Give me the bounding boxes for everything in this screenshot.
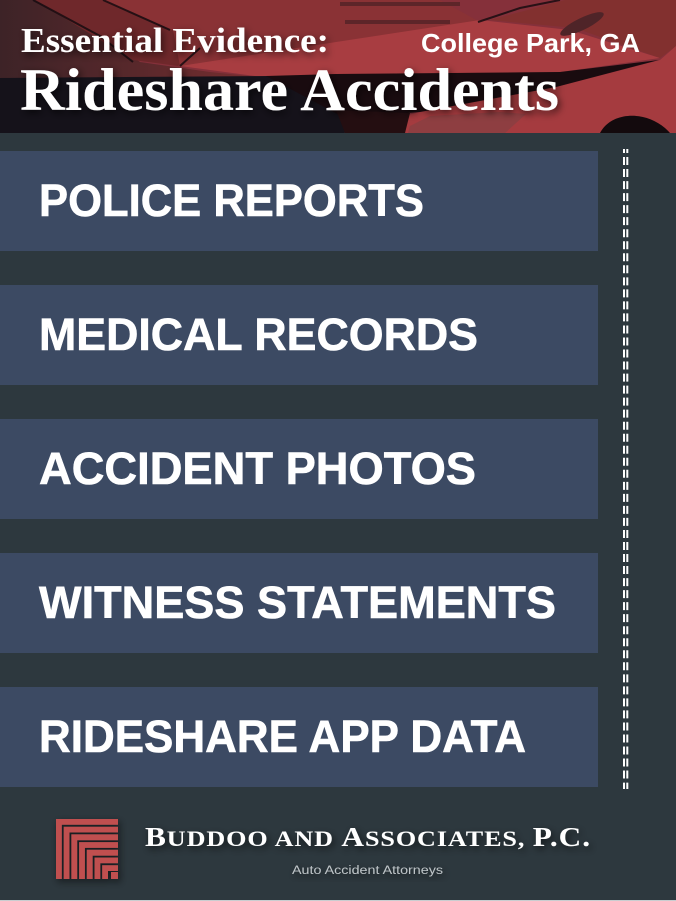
- panel: police reports: [0, 151, 598, 251]
- icon: firm logo: [59, 822, 118, 879]
- firm tagline: Auto Accident Attorneys: [292, 865, 443, 877]
- red crease band: [35, 0, 200, 66]
- dashed road line: [624, 149, 627, 789]
- windshield blob: [558, 8, 606, 40]
- label: medical records: MEDICAL RECORDS: [39, 309, 478, 360]
- wheel arch: [600, 116, 670, 133]
- panel: rideshare app data: [0, 687, 598, 787]
- header subtitle: Essential Evidence: Essential Evidence:: [21, 21, 329, 60]
- upper red area: [103, 0, 480, 66]
- crease lines: [33, 0, 560, 66]
- dark lower-left car: [0, 76, 345, 133]
- lower right fender: [336, 46, 676, 133]
- label: accident photos: ACCIDENT PHOTOS: [39, 443, 476, 494]
- header banner: duotone crashed car photo: [0, 0, 676, 133]
- label: police reports: POLICE REPORTS: [39, 175, 424, 226]
- bottom edge line: [0, 900, 676, 901]
- bumper shadow: [336, 110, 410, 133]
- header title: Rideshare Accidents: Rideshare Accidents: [20, 57, 559, 123]
- label: rideshare app data: RIDESHARE APP DATA: [39, 711, 526, 762]
- dark wedge under hood: [266, 60, 659, 118]
- panel: witness statements: [0, 553, 598, 653]
- location: College Park, GA: College Park, GA: [421, 28, 640, 58]
- windshield: [490, 0, 676, 58]
- left dim car body: [0, 0, 270, 80]
- streaks: [340, 4, 460, 22]
- label: witness statements: WITNESS STATEMENTS: [39, 577, 556, 628]
- panel: accident photos: [0, 419, 598, 519]
- headlight: [408, 112, 526, 133]
- hood: [180, 20, 660, 78]
- firm name: BUDDOO AND ASSOCIATES, P.C.: [145, 822, 591, 852]
- panel: medical records: [0, 285, 598, 385]
